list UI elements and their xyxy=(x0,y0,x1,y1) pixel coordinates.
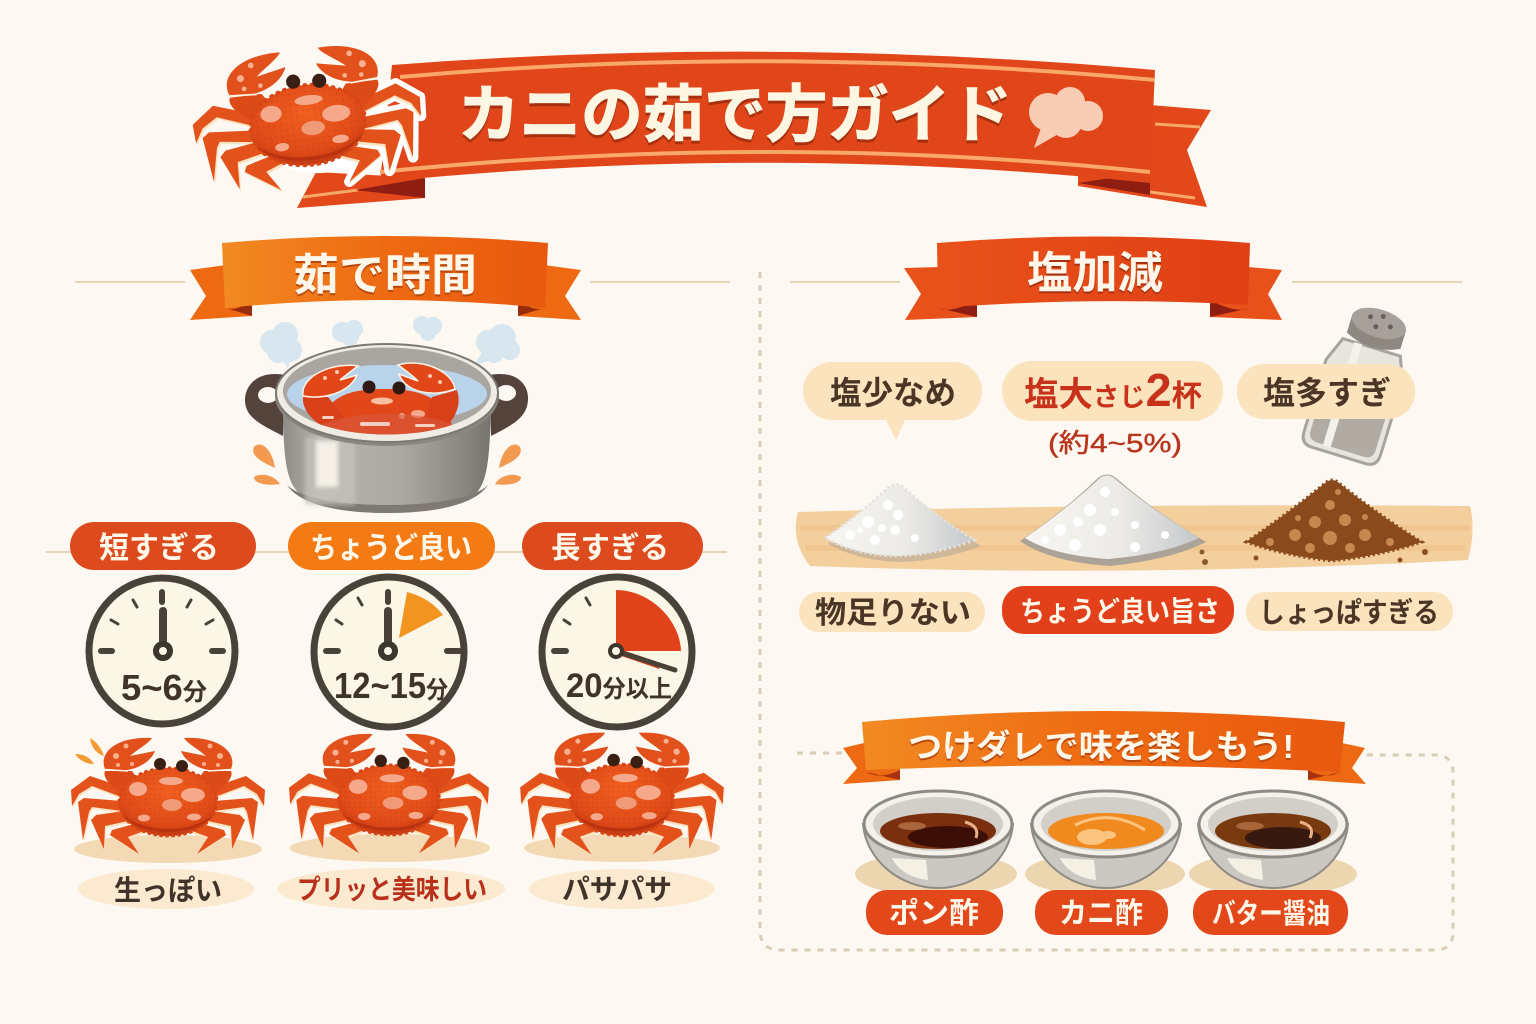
section heading: 塩加減: 塩加減 xyxy=(1027,249,1163,298)
label: バター醤油: バター醤油 xyxy=(1212,898,1330,929)
note: 約4~5%: (約4~5%) xyxy=(1048,428,1182,458)
ribbon stripes xyxy=(380,61,1155,172)
ribbon main band xyxy=(380,52,1155,183)
right ribbon tail xyxy=(1078,105,1211,207)
timing rule lines xyxy=(46,551,727,553)
bubble: 塩多すぎ: 塩多すぎ xyxy=(1263,375,1391,411)
label: ポン酢 xyxy=(866,890,1003,935)
clock: 12~15分 xyxy=(314,577,464,727)
label: 物足りない xyxy=(799,592,985,632)
clock: 12~15分: 12~15分 xyxy=(334,665,448,706)
bubble: 塩大さじ2杯 xyxy=(1002,361,1223,421)
left ribbon tail xyxy=(297,172,425,208)
title ribbon xyxy=(297,52,1211,208)
pot rim and interior xyxy=(275,346,499,446)
salt pile: just right xyxy=(1020,474,1208,566)
label: パサパサ xyxy=(529,869,715,909)
title crab xyxy=(185,36,429,202)
label: 生っぽい xyxy=(78,869,254,909)
clock: 5~6分 xyxy=(89,578,235,724)
label: パサパサ: パサパサ xyxy=(562,874,672,905)
crab in pot xyxy=(302,362,459,434)
bubble: 塩少なめ: 塩少なめ xyxy=(830,375,956,411)
pill: 長すぎる: 長すぎる xyxy=(551,532,669,565)
label: プリッと美味しい xyxy=(277,868,505,910)
bowl: バター醤油 xyxy=(1189,791,1357,896)
label: ポン酢: ポン酢 xyxy=(889,897,979,930)
label: しょっぱすぎる: しょっぱすぎる xyxy=(1259,597,1439,628)
clock: 20分以上: 20分以上 xyxy=(566,667,672,705)
crab: undercooked xyxy=(71,738,265,863)
orange splashes xyxy=(253,445,521,485)
crab: just right xyxy=(289,734,490,862)
label: カニ酢: カニ酢 xyxy=(1059,897,1143,930)
label: 物足りない: 物足りない xyxy=(815,597,971,630)
icon: salt shaker xyxy=(1300,298,1421,467)
salt pile: too much xyxy=(1246,480,1428,562)
section heading: 塩加減 xyxy=(790,236,1462,320)
label: バター醤油 xyxy=(1193,890,1348,935)
pot with crab xyxy=(245,344,528,513)
pot handles xyxy=(245,374,528,436)
icon: steam clouds xyxy=(260,316,520,368)
section frame dashed border xyxy=(760,272,1453,950)
crab: overcooked xyxy=(520,733,724,862)
pill: 短すぎる: 短すぎる xyxy=(99,532,219,565)
section heading: 茹で時間: 茹で時間 xyxy=(293,251,477,300)
label: カニ酢 xyxy=(1035,890,1168,935)
icon: steam cloud xyxy=(1029,87,1103,148)
bubble: 塩多すぎ xyxy=(1237,364,1415,419)
bubble: 塩大さじ2杯: 塩大さじ2杯 xyxy=(1024,364,1202,416)
salt pile: low xyxy=(825,484,981,562)
section heading: 茹で時間 xyxy=(75,236,730,320)
bowl: カニ酢 xyxy=(1025,791,1185,896)
clock: 20分以上 xyxy=(542,577,692,727)
pill: 長すぎる xyxy=(522,522,703,570)
dipping sauce banner xyxy=(843,711,1366,784)
pill: ちょうど良い: ちょうど良い xyxy=(310,532,472,565)
pill: 短すぎる xyxy=(70,522,256,570)
table band xyxy=(796,505,1473,571)
bubble: 塩少なめ xyxy=(803,362,982,440)
label: ちょうど良い旨さ xyxy=(1002,586,1234,634)
dipping sauce banner: つけダレで味を楽しもう! xyxy=(908,728,1294,765)
label: プリッと美味しい: プリッと美味しい xyxy=(297,875,487,905)
pot body xyxy=(283,400,491,513)
label: 生っぽい: 生っぽい xyxy=(114,875,222,906)
bowl: ポン酢 xyxy=(855,791,1017,896)
title text: カニの茹で方ガイド xyxy=(458,81,1012,150)
label: ちょうど良い旨さ: ちょうど良い旨さ xyxy=(1020,596,1220,627)
water xyxy=(287,365,487,423)
clock: 5~6分: 5~6分 xyxy=(121,667,207,708)
pill: ちょうど良い xyxy=(288,522,495,570)
